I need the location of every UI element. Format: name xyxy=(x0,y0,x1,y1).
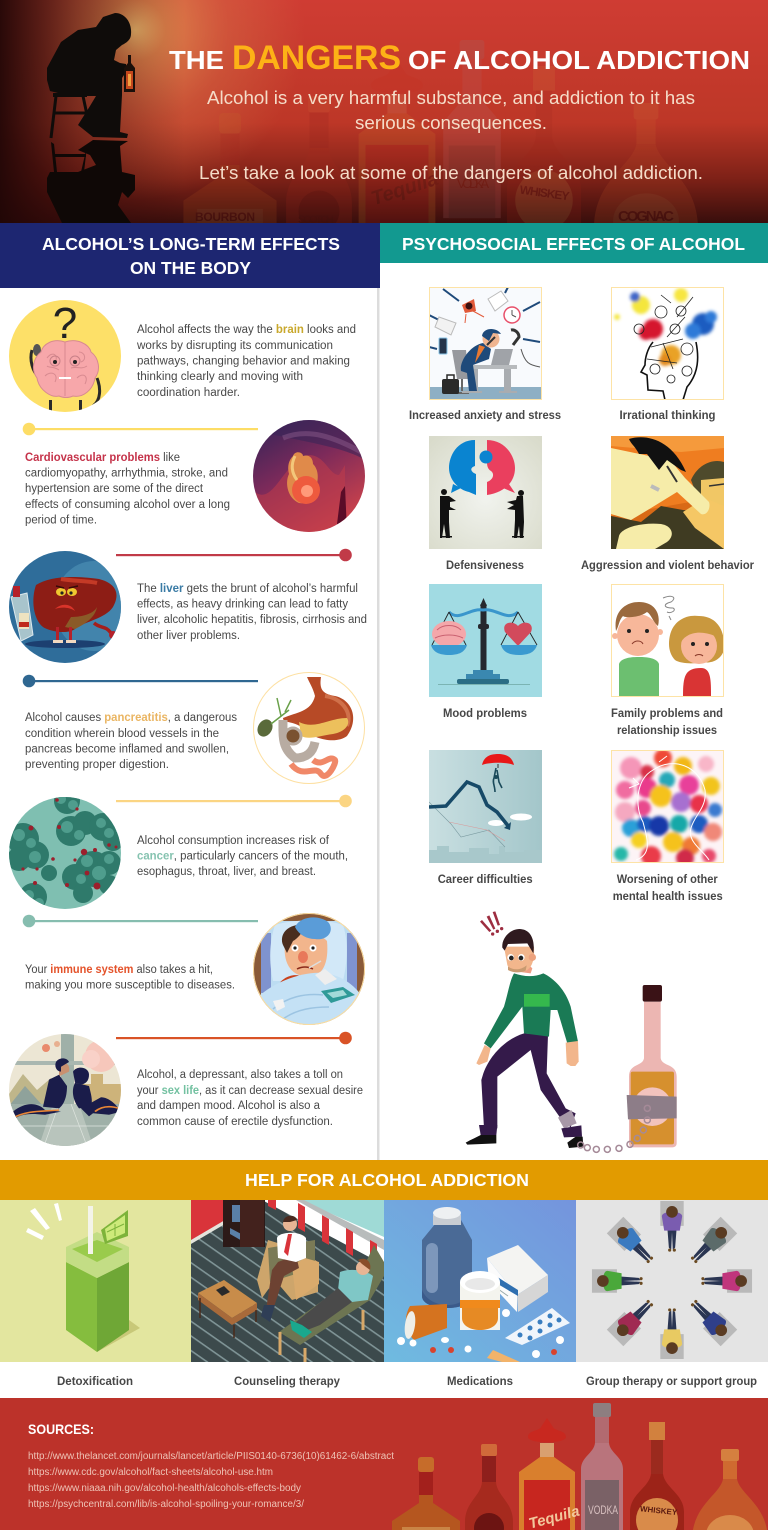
label: relationship issues xyxy=(617,725,717,737)
title: OF ALCOHOL ADDICTION xyxy=(408,47,750,75)
heading: psychosocial effects: PSYCHOSOCIAL EFFECTS OF ALCOHOL xyxy=(402,234,745,254)
label xyxy=(611,708,723,737)
image: family problems xyxy=(611,584,724,697)
text: cardiovascular: period of time. xyxy=(25,514,97,526)
labels: help options: Detoxification xyxy=(57,1376,133,1388)
text: pancreas: Alcohol causes pancreatitis, a dangerous xyxy=(25,712,237,724)
text: liver: effects, as heavy drinking can lead to fatty xyxy=(137,598,348,610)
text: pancreas xyxy=(25,712,237,771)
labels: help options: Counseling therapy xyxy=(234,1376,341,1388)
text: brain xyxy=(136,324,356,399)
icon: silhouette of man with bottle xyxy=(47,13,135,223)
bottle xyxy=(627,985,677,1147)
connector: orange xyxy=(116,1032,352,1044)
label: mental health issues xyxy=(613,891,723,903)
heading: psychosocial effects xyxy=(380,223,768,263)
text: sex life xyxy=(137,1069,363,1128)
text: cardiovascular: hypertension are some of the direct xyxy=(25,483,204,495)
panel: psychosocial effects xyxy=(409,287,754,1152)
text: sex life: common cause of erectile dysfunction. xyxy=(137,1116,333,1128)
image: detoxification xyxy=(0,1200,191,1362)
heading xyxy=(0,1160,768,1200)
source links: http://www.thelancet.com/journals/lancet/article/PIIS0140-6736(10)61462-6/abstract xyxy=(28,1451,394,1462)
exclamation marks xyxy=(480,911,503,936)
source links: https://psychcentral.com/lib/is-alcohol-spoiling-your-romance/3/ xyxy=(28,1499,304,1510)
title: DANGERS xyxy=(232,39,401,77)
footer: sources xyxy=(0,1398,768,1530)
heading: long-term effects xyxy=(0,223,380,288)
faded liquor bottles: VODKA xyxy=(457,176,489,191)
label: Irrational thinking xyxy=(620,410,716,422)
intro text: Let’s take a look at some of the dangers of alcohol addiction. xyxy=(199,163,703,183)
icon: brain: ? xyxy=(53,299,77,348)
text: brain: works by disrupting its communication xyxy=(136,340,333,352)
text: brain: pathways, changing behavior and making xyxy=(137,356,350,368)
text: sex life: your sex life, as it can decrease sexual desire xyxy=(137,1085,363,1097)
image: career difficulties xyxy=(429,750,542,863)
text: brain: coordination harder. xyxy=(137,387,240,399)
heading: long-term effects: ALCOHOL’S LONG-TERM EFFECTS xyxy=(42,234,340,254)
label: Worsening of other xyxy=(617,874,718,886)
label: Career difficulties xyxy=(438,874,533,886)
labels: help options xyxy=(0,1362,768,1398)
image: medications xyxy=(384,1200,576,1362)
text: brain: thinking clearly and moving with xyxy=(137,371,303,383)
label xyxy=(613,874,723,903)
image: aggression xyxy=(611,436,724,549)
image: anxiety and stress xyxy=(429,287,542,400)
text: cardiovascular: Cardiovascular problems like xyxy=(25,452,180,464)
liquor bottles xyxy=(392,1403,767,1530)
text: liver: liver, alcoholic hepatitis, fibrosis, cirrhosis and xyxy=(137,614,367,626)
image: defensiveness xyxy=(429,436,542,549)
text: cancer: Alcohol consumption increases risk of xyxy=(137,835,330,847)
icon: heart xyxy=(253,420,365,532)
text: sex life: Alcohol, a depressant, also takes a toll on xyxy=(137,1069,343,1081)
image: counseling therapy xyxy=(191,1200,384,1362)
label: Family problems and xyxy=(611,708,723,720)
liquor bottles: VODKA xyxy=(588,1503,618,1517)
faded liquor bottles: BOURBON xyxy=(195,210,255,224)
illustration: man chained to bottle xyxy=(466,911,677,1152)
label: Increased anxiety and stress xyxy=(409,410,561,422)
section: help for alcohol addiction xyxy=(0,1160,768,1398)
heading: long-term effects: ON THE BODY xyxy=(130,258,251,278)
text: cancer xyxy=(137,835,348,878)
title xyxy=(169,39,750,77)
icon: brain xyxy=(9,300,121,412)
man xyxy=(466,929,583,1148)
icon: couple back to back xyxy=(9,1034,121,1146)
label: Defensiveness xyxy=(446,560,524,572)
panel: long-term effects xyxy=(7,299,367,1146)
connector: red xyxy=(116,549,352,561)
heading: sources: SOURCES: xyxy=(28,1421,94,1437)
intro text: Alcohol is a very harmful substance, and addiction to it has xyxy=(207,88,695,108)
faded liquor bottles: WHISKEY xyxy=(519,183,570,203)
source links: https://www.niaaa.nih.gov/alcohol-health/alcohols-effects-body xyxy=(28,1483,301,1494)
heading: HELP FOR ALCOHOL ADDICTION xyxy=(245,1170,529,1190)
text: cancer: esophagus, throat, liver, and breast. xyxy=(137,866,316,878)
image: mental health xyxy=(611,750,724,863)
labels: help options: Medications xyxy=(447,1376,513,1388)
connector: teal xyxy=(23,915,258,927)
connector: blue xyxy=(23,675,258,687)
text: cancer: cancer, particularly cancers of the mouth, xyxy=(137,850,348,862)
text: liver xyxy=(137,583,367,642)
icon: liver xyxy=(9,551,121,663)
text: immune system: Your immune system also takes a hit, xyxy=(25,964,213,976)
text: pancreas: condition wherein blood vessels in the xyxy=(25,728,219,740)
silhouette reflection xyxy=(47,140,135,223)
image: group therapy xyxy=(576,1200,768,1362)
icon: cancer cells xyxy=(9,797,121,909)
header banner xyxy=(0,0,768,291)
text: liver: The liver gets the brunt of alcohol’s harmful xyxy=(137,583,358,595)
faded liquor bottles xyxy=(183,40,698,291)
connector: yellow xyxy=(23,423,258,435)
icon: sick man in bed xyxy=(253,913,365,1025)
text: immune system xyxy=(25,964,235,992)
text: pancreas: pancreas become inflamed and swollen, xyxy=(25,744,229,756)
faded liquor bottles: SCOTCH xyxy=(298,214,334,226)
text: cardiovascular: effects of consuming alcohol over a long xyxy=(25,499,230,511)
title: THE xyxy=(169,47,224,75)
intro text xyxy=(199,88,703,183)
labels: help options: Group therapy or support group xyxy=(586,1376,757,1388)
text: brain: Alcohol affects the way the brain looks and xyxy=(137,324,356,336)
faded liquor bottles: COGNAC xyxy=(618,208,674,225)
chain xyxy=(578,1105,650,1152)
intro text: serious consequences. xyxy=(355,113,547,133)
text: pancreas: preventing proper digestion. xyxy=(25,759,169,771)
image: irrational thinking xyxy=(611,287,724,400)
label: Aggression and violent behavior xyxy=(581,560,754,572)
text: sex life: and dampen mood. Alcohol is also a xyxy=(137,1100,321,1112)
source links xyxy=(28,1451,394,1510)
label: Mood problems xyxy=(443,708,527,720)
icon: pancreas xyxy=(253,672,365,784)
image: mood problems xyxy=(429,584,542,697)
text: liver: other liver problems. xyxy=(137,630,240,642)
liquor bottles: WHISKEY xyxy=(640,1504,678,1517)
source links: https://www.cdc.gov/alcohol/fact-sheets/alcohol-use.htm xyxy=(28,1467,273,1478)
text: cardiovascular xyxy=(25,452,230,526)
text: immune system: making you more susceptible to diseases. xyxy=(25,980,235,992)
faded liquor bottles: Tequila xyxy=(368,168,441,210)
text: cardiovascular: cardiomyopathy, arrhythmia, stroke, and xyxy=(25,468,228,480)
connector: light orange xyxy=(116,795,352,807)
